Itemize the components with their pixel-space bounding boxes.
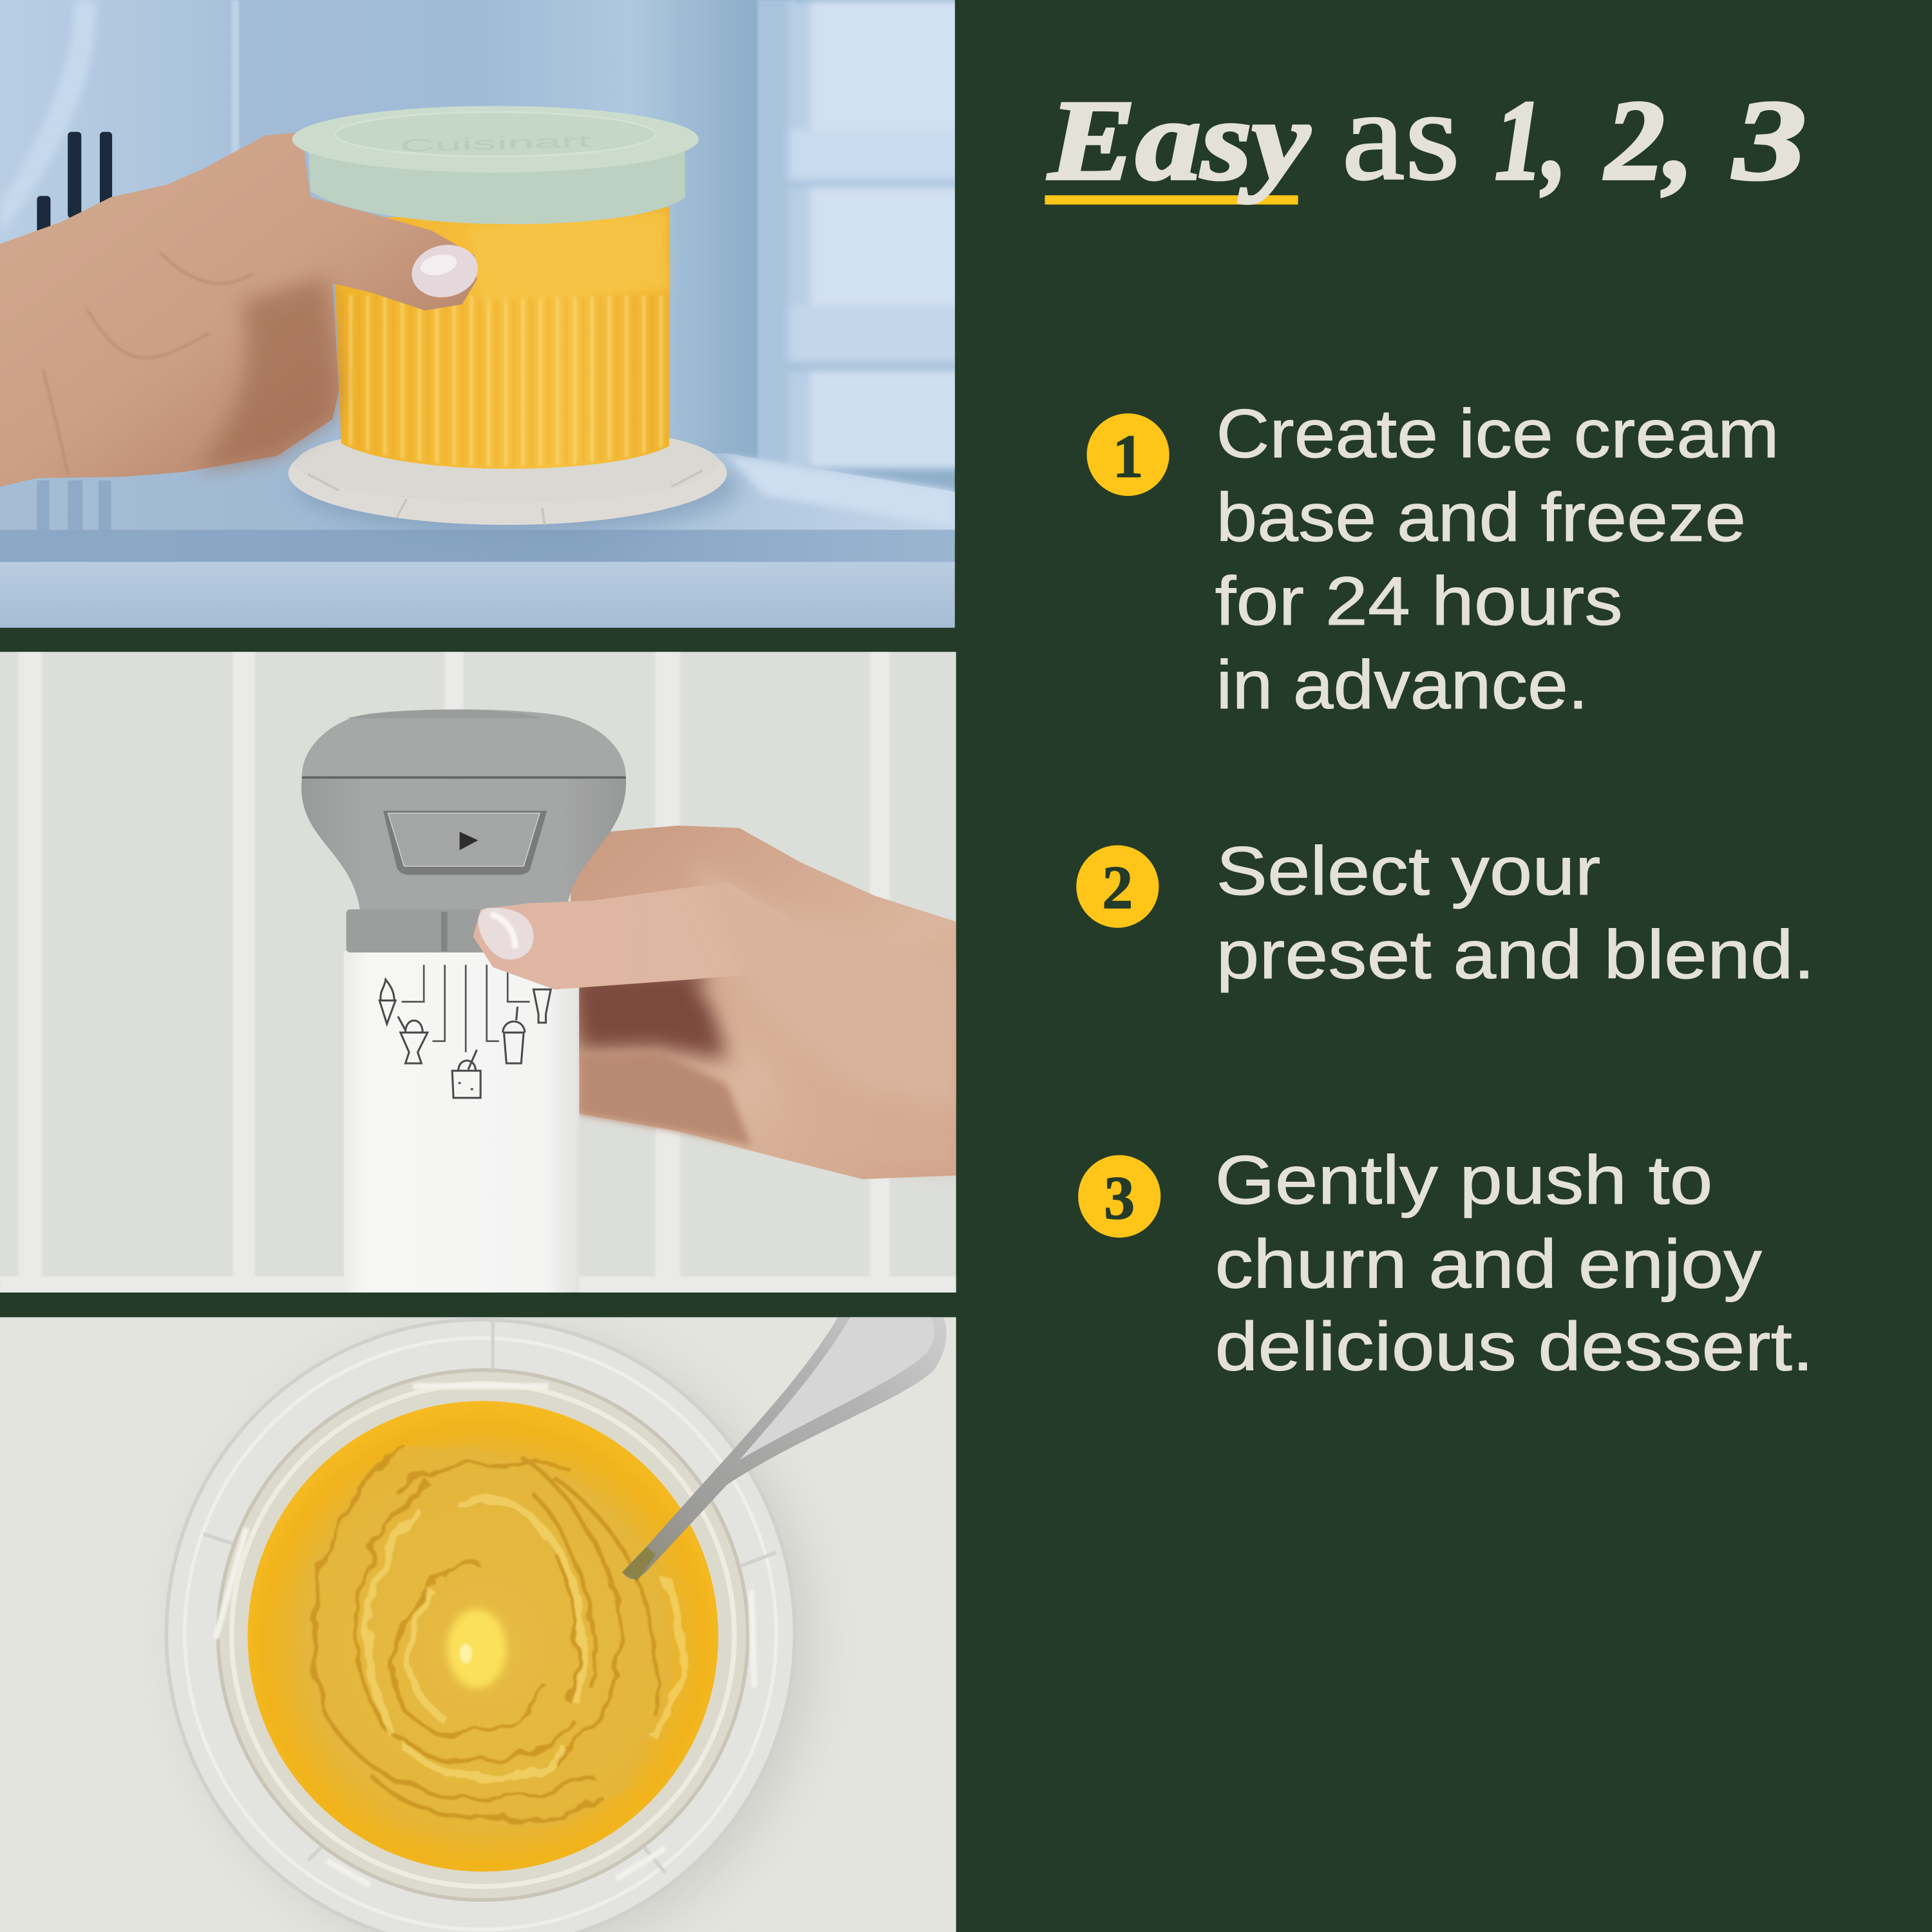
dial top (346, 710, 542, 718)
step 1 text: Create ice cream (1216, 395, 1779, 472)
title underline (1045, 195, 1298, 205)
centre peak (448, 1609, 506, 1688)
clear cup wall (216, 1370, 754, 1900)
title number 2: 2, (1604, 77, 1694, 204)
step 1 text: for 24 hours (1215, 562, 1623, 639)
step 3 text: Gently push to (1215, 1141, 1712, 1218)
number badge 3 (1078, 1155, 1160, 1238)
thumb nail (478, 908, 534, 960)
wall seam (232, 0, 239, 154)
preset lines (402, 965, 530, 1052)
title number 3: 3 (1732, 77, 1806, 204)
play icon (460, 831, 478, 850)
step 1 text: in advance. (1216, 646, 1588, 723)
step 1 text (1215, 395, 1779, 723)
number badge 3: 3 (1104, 1164, 1135, 1232)
number badge 2: 2 (1102, 853, 1133, 922)
step 3 text: churn and enjoy (1215, 1225, 1762, 1302)
dark gap between fingers (569, 967, 727, 1059)
lower finger (579, 1051, 752, 1146)
swirl highlights (368, 1499, 681, 1777)
right column (758, 0, 795, 475)
panel: step 3 photo, churned dessert with spoon (0, 1317, 956, 1932)
hand fingers behind body (569, 826, 956, 1179)
start button (383, 811, 547, 875)
base plate shadow (296, 440, 739, 533)
freezer interior wall (0, 0, 955, 542)
swirl body (301, 1445, 671, 1826)
step 1 text: base and freeze (1216, 478, 1746, 556)
bowl shadow (185, 1331, 813, 1932)
step 2 text (1216, 832, 1815, 993)
number badge 2 (1076, 845, 1159, 928)
preset icons (379, 980, 551, 1098)
freezer left curved detail (0, 0, 96, 234)
shelf lower band (0, 562, 955, 629)
spoon (622, 1317, 947, 1581)
number badge 1 (1087, 413, 1170, 496)
door shelves (788, 0, 961, 468)
mint lid (292, 106, 699, 224)
step 2 (1076, 832, 1815, 993)
panel: text column (1045, 64, 1815, 1385)
frozen mango jar (333, 207, 669, 469)
mango ice cream (248, 1401, 718, 1871)
shelf top surface (0, 450, 961, 533)
collar (346, 909, 574, 952)
step 2 text: Select your (1216, 832, 1600, 909)
shelf highlight (727, 456, 955, 527)
thumbnail (407, 239, 483, 303)
thumb on blender (473, 862, 956, 1109)
swirl shadows (314, 1448, 658, 1821)
shadow under thumb (197, 277, 339, 471)
panel: step 1 photo, jar in freezer (0, 0, 961, 629)
blender head (301, 710, 626, 952)
title number 1: 1, (1495, 77, 1567, 204)
title word as: as (1342, 64, 1460, 207)
title (1045, 64, 1806, 207)
wall stripes (0, 652, 956, 1295)
step 3 text: delicious dessert. (1215, 1308, 1814, 1385)
hand holding jar (0, 132, 483, 487)
lid brand: Cuisinart (400, 131, 592, 155)
frosted base plate (289, 421, 727, 525)
frosted outer ring (166, 1320, 795, 1932)
step 1 (1087, 395, 1779, 723)
number badge 1: 1 (1113, 422, 1144, 490)
title word Easy: Easy (1047, 77, 1311, 204)
step 3 (1078, 1141, 1814, 1385)
black bars behind hand (37, 132, 112, 235)
shelf front band (0, 530, 955, 568)
counter surface (0, 1317, 956, 1932)
panel: step 2 photo, blender with thumb (0, 652, 956, 1296)
hand creases (43, 252, 252, 475)
blender body (344, 951, 579, 1296)
step 3 text (1215, 1141, 1814, 1385)
panelled wall (0, 652, 956, 1293)
shelf reflection (37, 480, 111, 533)
step 2 text: preset and blend. (1216, 916, 1815, 993)
